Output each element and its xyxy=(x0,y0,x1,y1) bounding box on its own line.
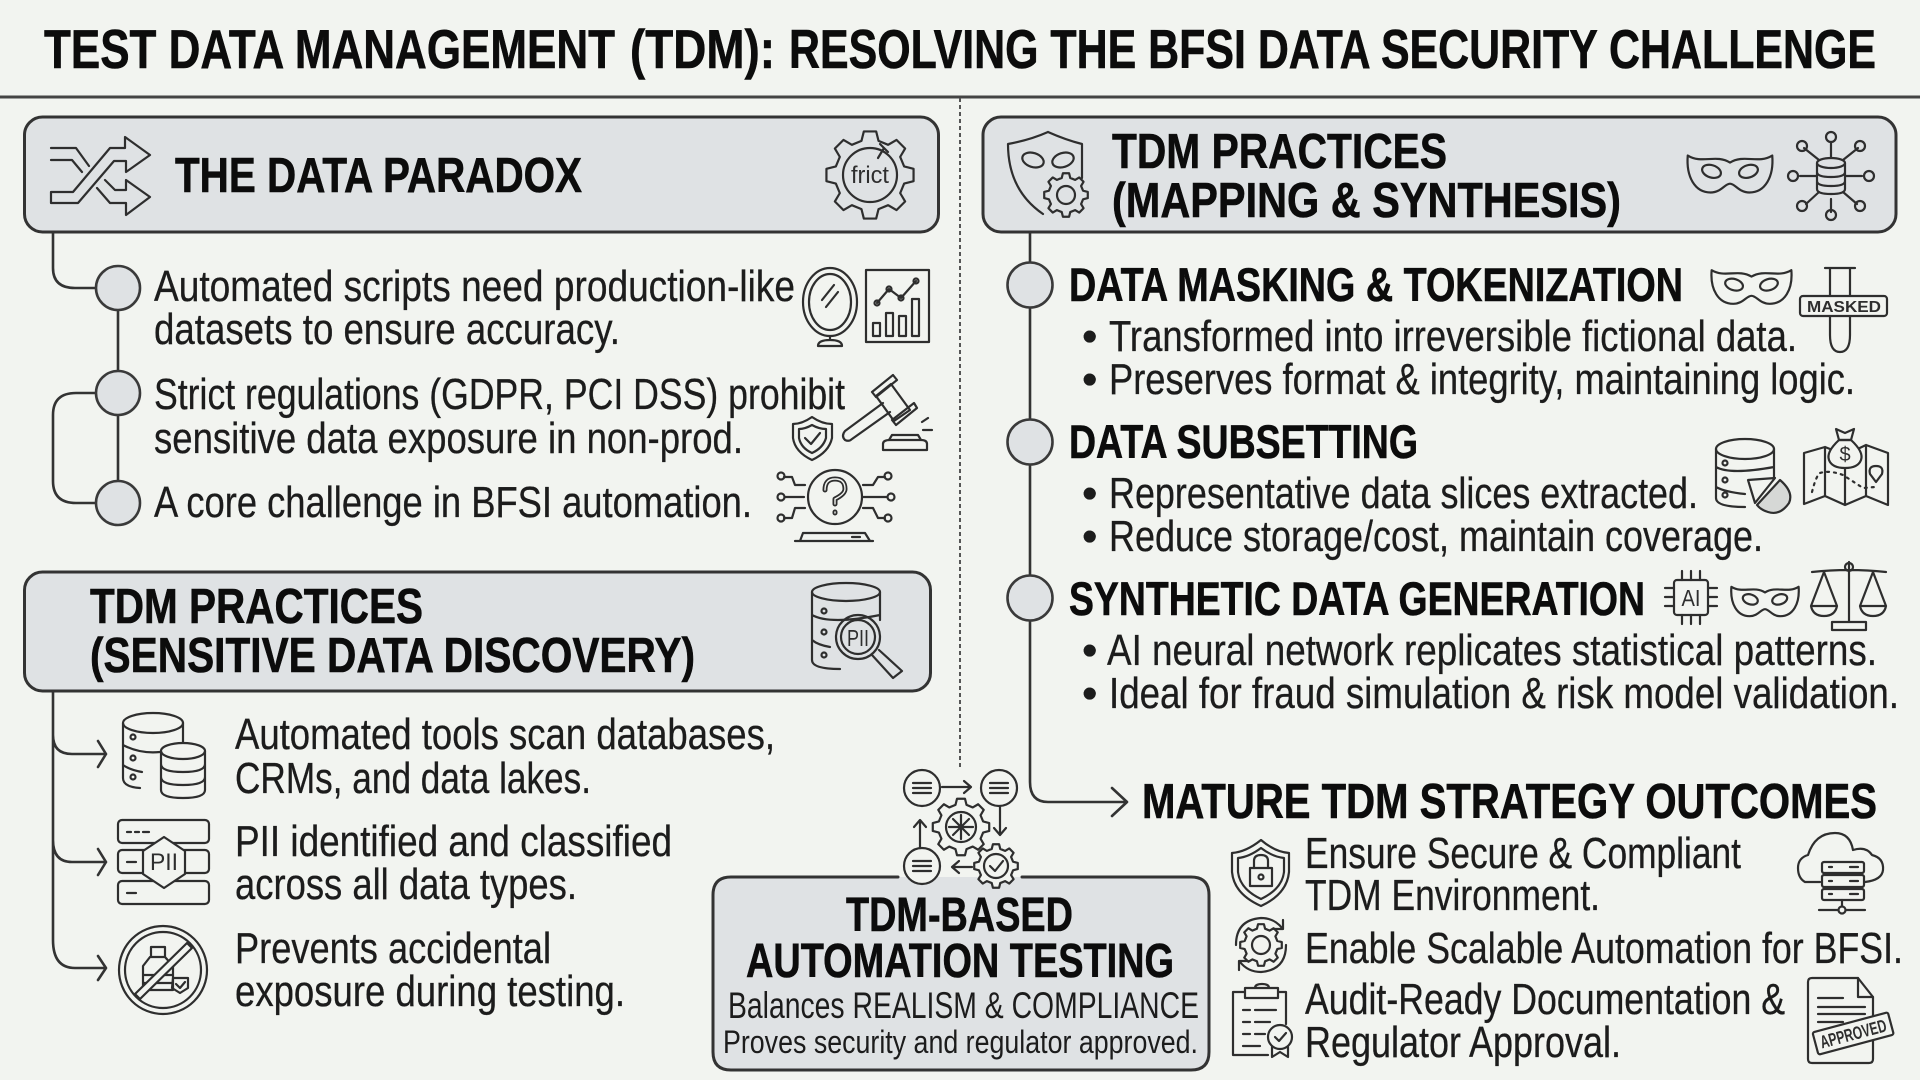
icon: database with PII magnifier xyxy=(812,583,902,678)
icon: masked test tube: MASKED xyxy=(1807,299,1881,316)
heading: sensitive data discovery: TDM PRACTICES xyxy=(90,580,423,634)
bullets: synthetic: • xyxy=(1082,669,1097,718)
text: PII classified: across all data types. xyxy=(235,860,577,909)
bullet node 2 xyxy=(96,371,140,415)
node: subsetting xyxy=(1008,420,1052,464)
bullet node 3 xyxy=(96,481,140,525)
heading: the data paradox: THE DATA PARADOX xyxy=(175,149,582,203)
bullets: masking xyxy=(1082,312,1855,404)
icon: friction gear xyxy=(826,131,914,219)
text: regulator approved: Proves security and regulator approved. xyxy=(723,1024,1198,1060)
icon: automation cycle xyxy=(904,770,1018,888)
icon: no exposure xyxy=(119,926,207,1014)
title: TEST DATA MANAGEMENT xyxy=(44,18,615,80)
icon: friction gear: frict xyxy=(851,162,889,189)
bullets: synthetic: • xyxy=(1082,626,1097,675)
icon: mirror xyxy=(803,268,857,346)
heading: TDM-based automation testing: TDM-BASED xyxy=(846,889,1073,942)
icon: mask xyxy=(1688,156,1772,192)
icon: PII classification xyxy=(118,820,209,904)
icon: shuffle arrows xyxy=(51,137,150,215)
connector: practices spine to outcomes xyxy=(1030,232,1127,816)
icon: map with money bag xyxy=(1804,429,1888,505)
icon: cloud servers xyxy=(1798,833,1883,914)
connector: paradox tree xyxy=(53,232,118,503)
text: audit ready xyxy=(1305,975,1785,1067)
text: prevents exposure: Prevents accidental xyxy=(235,924,551,973)
heading: masking and tokenization: DATA MASKING & TOKENIZATION xyxy=(1069,258,1683,311)
bullets: subsetting: • xyxy=(1082,512,1097,561)
icon: gavel and shield xyxy=(793,375,932,460)
bullets: subsetting xyxy=(1082,469,1763,561)
text: secure and compliant: TDM Environment. xyxy=(1305,871,1600,920)
heading: TDM-based automation testing: AUTOMATION TESTING xyxy=(746,935,1174,988)
panel: sensitive data discovery xyxy=(24,572,930,691)
text: core challenge: A core challenge in BFSI automation. xyxy=(154,478,752,527)
text: secure and compliant: Ensure Secure & Compliant xyxy=(1305,829,1741,878)
icon: database network xyxy=(1788,132,1874,220)
heading: sensitive data discovery: (SENSITIVE DATA DISCOVERY) xyxy=(90,629,695,683)
bullets: subsetting: Reduce storage/cost, maintain coverage. xyxy=(1109,512,1763,561)
text: scanning tools xyxy=(235,710,775,803)
icon: circuit question xyxy=(778,470,894,541)
icon: AI chip xyxy=(1665,571,1717,624)
heading: sensitive data discovery xyxy=(90,580,695,683)
bullets: masking: • xyxy=(1082,355,1097,404)
icon: PII classification: PII xyxy=(150,849,178,876)
icon: growth chart xyxy=(866,270,929,342)
panel: the data paradox xyxy=(24,117,938,232)
title: (TDM): xyxy=(630,18,775,80)
icon: approved document xyxy=(1808,978,1894,1063)
title xyxy=(44,18,1876,80)
icon: databases xyxy=(123,713,205,798)
heading: mapping and synthesis: TDM PRACTICES xyxy=(1112,125,1447,179)
bullets: subsetting: Representative data slices extracted. xyxy=(1109,469,1698,518)
text: scanning tools: CRMs, and data lakes. xyxy=(235,754,591,803)
connector: discovery branches xyxy=(53,691,106,980)
icon: AI chip: AI xyxy=(1682,585,1700,611)
text: strict regulations: sensitive data exposure in non-prod. xyxy=(154,414,743,463)
panel: TDM-based automation testing xyxy=(713,877,1209,1070)
panel: mapping and synthesis xyxy=(983,117,1896,232)
heading: mapping and synthesis: (MAPPING & SYNTHESIS) xyxy=(1112,174,1621,228)
node: masking xyxy=(1008,262,1052,308)
icon: database slice xyxy=(1716,439,1790,513)
icon: balance scale xyxy=(1811,562,1886,630)
icon: audit clipboard xyxy=(1233,984,1292,1057)
text: strict regulations xyxy=(154,370,845,463)
icon: shield lock xyxy=(1232,840,1289,906)
icon: shield mask gear xyxy=(1008,132,1088,217)
text: production-like datasets: Automated scripts need production-like xyxy=(154,262,795,311)
bullets: masking: Transformed into irreversible fictional data. xyxy=(1109,312,1797,361)
icon: approved document: APPROVED xyxy=(1818,1016,1889,1052)
text: PII classified: PII identified and classified xyxy=(235,817,672,866)
text: prevents exposure: exposure during testing. xyxy=(235,967,625,1016)
icon: mask synthetic xyxy=(1731,587,1799,616)
text: audit ready: Regulator Approval. xyxy=(1305,1018,1621,1067)
text: scanning tools: Automated tools scan databases, xyxy=(235,710,775,759)
heading: TDM-based automation testing xyxy=(746,889,1174,988)
icon: mask small xyxy=(1711,270,1792,304)
text: balances realism and compliance: Balances REALISM & COMPLIANCE xyxy=(728,985,1199,1026)
heading: synthetic data generation: SYNTHETIC DATA GENERATION xyxy=(1069,572,1645,625)
text: prevents exposure xyxy=(235,924,625,1016)
text: production-like datasets xyxy=(154,262,795,354)
bullet node 1 xyxy=(96,266,140,310)
text: production-like datasets: datasets to ensure accuracy. xyxy=(154,305,620,354)
icon: gear cycle xyxy=(1236,918,1286,972)
bullets: subsetting: • xyxy=(1082,469,1097,518)
bullets: masking: • xyxy=(1082,312,1097,361)
heading: mapping and synthesis xyxy=(1112,125,1621,228)
icon: map with money bag: $ xyxy=(1839,444,1851,466)
icon: masked test tube xyxy=(1800,268,1887,352)
text: PII classified xyxy=(235,817,672,909)
icon: database with PII magnifier: PII xyxy=(847,625,869,651)
node: synthetic xyxy=(1008,576,1052,620)
bullets: synthetic xyxy=(1082,626,1899,718)
text: audit ready: Audit-Ready Documentation & xyxy=(1305,975,1785,1024)
text: secure and compliant xyxy=(1305,829,1741,920)
heading: data subsetting: DATA SUBSETTING xyxy=(1069,415,1418,468)
text: strict regulations: Strict regulations (GDPR, PCI DSS) prohibit xyxy=(154,370,845,419)
